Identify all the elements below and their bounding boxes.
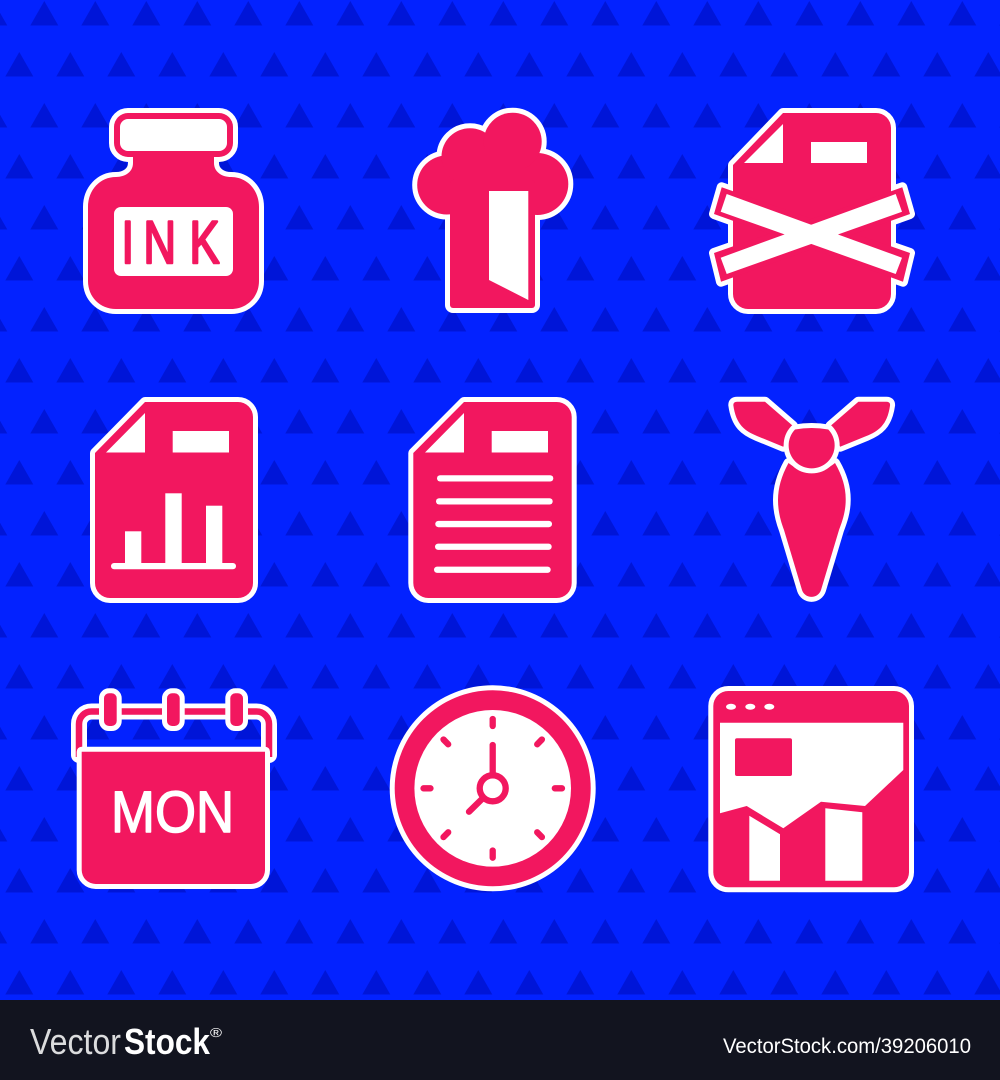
footer logo: Stock — [124, 1021, 211, 1062]
icon: document taped with an X — [714, 113, 910, 309]
icon: neck scarf tie — [733, 402, 890, 597]
icon: Monday calendar: MON — [111, 780, 234, 845]
footer logo: Vector — [30, 1021, 121, 1062]
icon: ink bottle: INK — [122, 210, 219, 277]
icon: wall clock — [395, 690, 591, 886]
icon: document with bar chart — [95, 402, 253, 598]
icon: chef hat — [417, 113, 568, 308]
icon: ink bottle — [88, 113, 259, 309]
footer image id: VectorStock.com/39206010 — [723, 1035, 971, 1058]
footer logo: ® — [210, 1025, 223, 1040]
icon: text document — [413, 402, 572, 598]
icon: browser window with chart — [713, 691, 909, 887]
icon: Monday calendar — [79, 693, 269, 884]
footer logo — [30, 1021, 223, 1062]
footer bar — [0, 1000, 1000, 1080]
